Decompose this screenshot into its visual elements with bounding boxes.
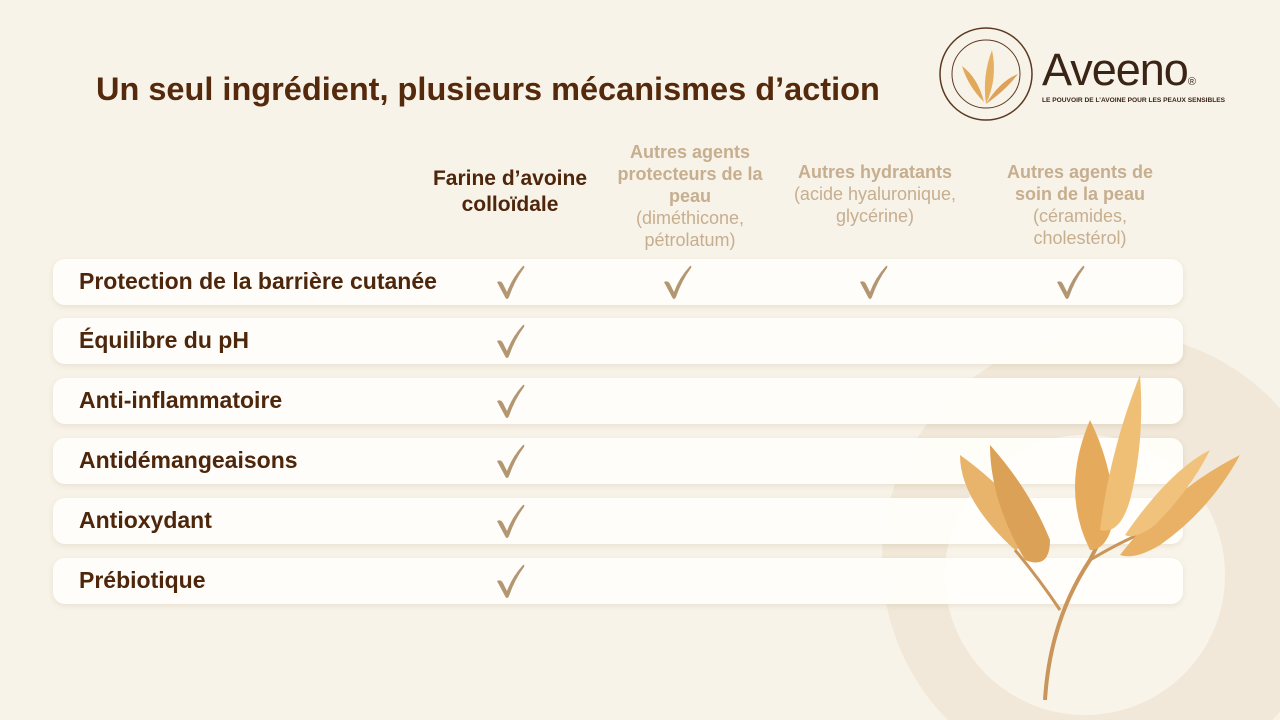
logo: Aveeno	[939, 27, 1225, 121]
row: pH	[53, 318, 1183, 364]
wordmark: Aveeno®	[1042, 44, 1196, 95]
icon: seal	[939, 27, 1033, 121]
row: antioxydant	[53, 498, 1183, 544]
column header: hydratants	[794, 162, 956, 226]
column header: Farine d'avoine: Farine d’avoine colloïdale	[433, 167, 587, 216]
row: pH: Équilibre du pH	[79, 327, 249, 353]
row: antidémangeaisons: Antidémangeaisons	[79, 447, 298, 473]
row: anti-inflammatoire	[53, 378, 1183, 424]
tagline: LE POUVOIR DE L’AVOINE POUR LES PEAUX SENSIBLES	[1042, 97, 1225, 104]
column header: soin: (céramides, cholestérol)	[1033, 206, 1127, 248]
row: antioxydant: Antioxydant	[79, 507, 212, 533]
column header: soin: Autres agents de soin de la peau	[1007, 162, 1153, 204]
column header: protecteurs	[617, 142, 763, 250]
column header: hydratants: Autres hydratants	[798, 162, 952, 182]
row: anti-inflammatoire: Anti-inflammatoire	[79, 387, 282, 413]
illustration: oat sprig	[960, 375, 1240, 700]
row: barrière	[53, 259, 1183, 305]
column header: protecteurs: Autres agents protecteurs de la peau	[617, 142, 763, 206]
title: Un seul ingrédient, plusieurs mécanismes d’action	[96, 71, 880, 107]
column header: hydratants: (acide hyaluronique, glycérine)	[794, 184, 956, 226]
row: barrière: Protection de la barrière cutanée	[79, 268, 437, 294]
column header: soin	[1007, 162, 1153, 248]
row: prébiotique	[53, 558, 1183, 604]
row: prébiotique: Prébiotique	[79, 567, 206, 593]
row: antidémangeaisons	[53, 438, 1183, 484]
column header: protecteurs: (diméthicone, pétrolatum)	[636, 208, 744, 250]
